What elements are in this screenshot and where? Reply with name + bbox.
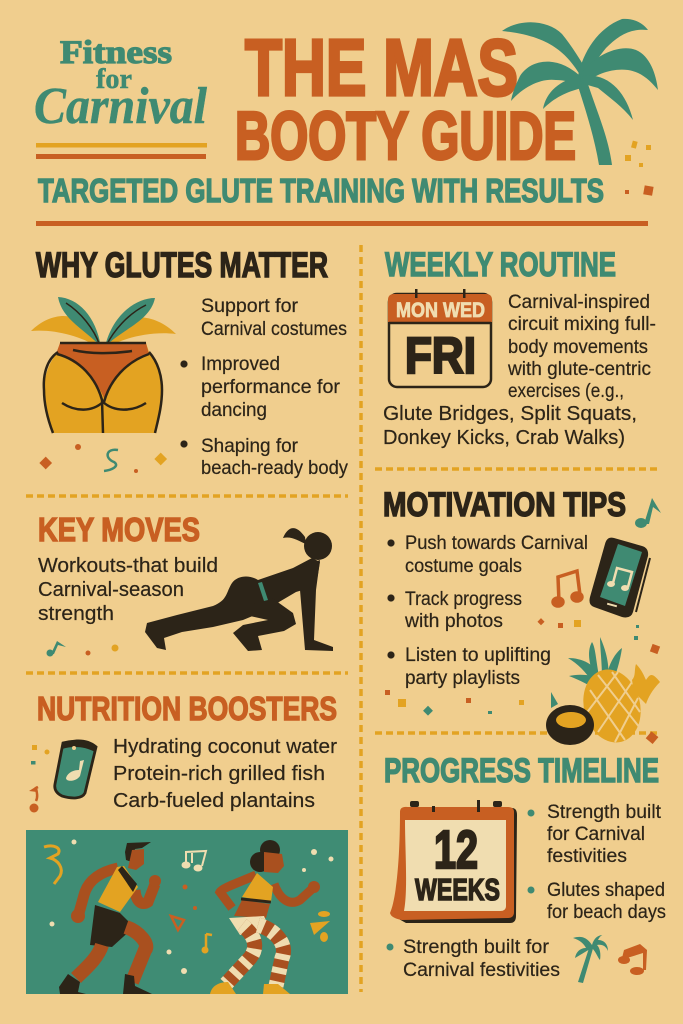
text: glute benefits: Carnival costumes <box>201 319 347 340</box>
text: glute benefits: beach-ready body <box>201 458 348 479</box>
heading: nutrition boosters: NUTRITION BOOSTERS <box>37 690 337 727</box>
header: fitness for carnival logo: Carnival <box>34 78 207 135</box>
text: progress list: Strength built <box>547 802 662 823</box>
icon: glutes with feathers <box>31 297 176 433</box>
heading: key moves: KEY MOVES <box>38 511 200 548</box>
heading: weekly routine: WEEKLY ROUTINE <box>385 246 616 284</box>
text: progress list <box>386 802 666 981</box>
text: key moves description: strength <box>38 603 114 625</box>
text: glute benefits: dancing <box>201 400 267 421</box>
panel: motivation tips <box>383 486 661 749</box>
text: glute benefits: Improved <box>201 354 280 375</box>
icon: palm tree <box>502 19 658 165</box>
title: the mas booty guide <box>235 23 576 174</box>
icon: exercise silhouette <box>145 528 333 651</box>
panel: weekly routine <box>383 246 656 449</box>
text: motivation list: with photos <box>404 611 503 632</box>
text: motivation list: Listen to uplifting <box>405 645 551 666</box>
title: the mas booty guide: THE MAS <box>245 23 518 112</box>
confetti: motivation <box>385 618 660 744</box>
woman dancer <box>210 840 320 994</box>
text: glute benefits: Support for <box>201 296 299 317</box>
text: weekly routine description <box>383 292 656 449</box>
text: motivation list: costume goals <box>405 556 522 577</box>
confetti: glutes <box>39 444 167 473</box>
text: progress list: festivities <box>547 846 627 867</box>
text: nutrition list: Carb-fueled plantains <box>113 789 315 812</box>
icon: orange note <box>553 571 582 606</box>
confetti: header <box>625 141 654 196</box>
icon: teal note <box>635 498 661 528</box>
text: key moves description: Carnival-season <box>38 579 184 601</box>
text: nutrition list: Protein-rich grilled fish <box>113 762 325 785</box>
icon: pineapple and coconut <box>546 637 660 749</box>
text: weekly routine description: circuit mixing full- <box>508 314 656 335</box>
text: nutrition list: Hydrating coconut water <box>113 735 337 758</box>
text: progress list: Strength built for <box>403 937 550 958</box>
icon: 12 weeks calendar: WEEKS <box>415 872 500 907</box>
panel: nutrition boosters <box>29 690 337 812</box>
icon: small palm <box>573 935 608 983</box>
panel: why glutes matter <box>31 246 348 479</box>
text: weekly routine description: Glute Bridges, Split Squats, <box>383 402 637 425</box>
icon: mon wed fri calendar: FRI <box>405 327 476 384</box>
icon: 12 weeks calendar <box>390 800 517 923</box>
man dancer <box>59 842 161 994</box>
text: weekly routine description: exercises (e.g., <box>508 381 624 402</box>
icon: phone <box>590 538 650 617</box>
text: progress list: for beach days <box>547 902 666 923</box>
heading: why glutes matter: WHY GLUTES MATTER <box>36 246 328 285</box>
text: motivation list <box>388 533 588 689</box>
text: weekly routine description: body movements <box>508 337 648 358</box>
icon: mon wed fri calendar <box>388 289 492 387</box>
text: glute benefits <box>180 296 348 479</box>
text: motivation list: Push towards Carnival <box>405 533 588 554</box>
panel: dancers illustration <box>26 830 348 994</box>
text: key moves description <box>38 555 218 625</box>
text: nutrition list <box>113 735 337 812</box>
heading: motivation tips: MOTIVATION TIPS <box>383 486 626 524</box>
text: weekly routine description: Carnival-inspired <box>508 292 650 313</box>
icon: confetti and note <box>46 641 118 656</box>
confetti and notes on panel <box>44 840 334 974</box>
icon: mon wed fri calendar: MON WED <box>396 299 485 322</box>
icon: small orange note <box>618 944 647 975</box>
text: progress list: Glutes shaped <box>547 880 665 901</box>
text: key moves description: Workouts-that build <box>38 555 218 577</box>
text: motivation list: Track progress <box>405 589 522 610</box>
icon: drink can <box>55 740 97 798</box>
text: progress list: for Carnival <box>547 824 645 845</box>
icon: 12 weeks calendar: 12 <box>434 820 478 880</box>
text: weekly routine description: with glute-centric <box>507 359 651 380</box>
panel: key moves <box>38 511 333 656</box>
header: fitness for carnival logo <box>34 35 207 159</box>
panel: progress timeline <box>384 752 666 983</box>
text: glute benefits: Shaping for <box>201 436 299 457</box>
text: glute benefits: performance for <box>201 377 341 398</box>
confetti and note: nutrition <box>29 745 50 812</box>
header: fitness for carnival logo: for <box>96 64 132 95</box>
header: fitness for carnival logo: Fitness <box>60 35 172 71</box>
text: weekly routine description: Donkey Kicks, Crab Walks) <box>383 426 625 449</box>
text: progress list: Carnival festivities <box>403 960 560 981</box>
text: motivation list: party playlists <box>405 668 520 689</box>
